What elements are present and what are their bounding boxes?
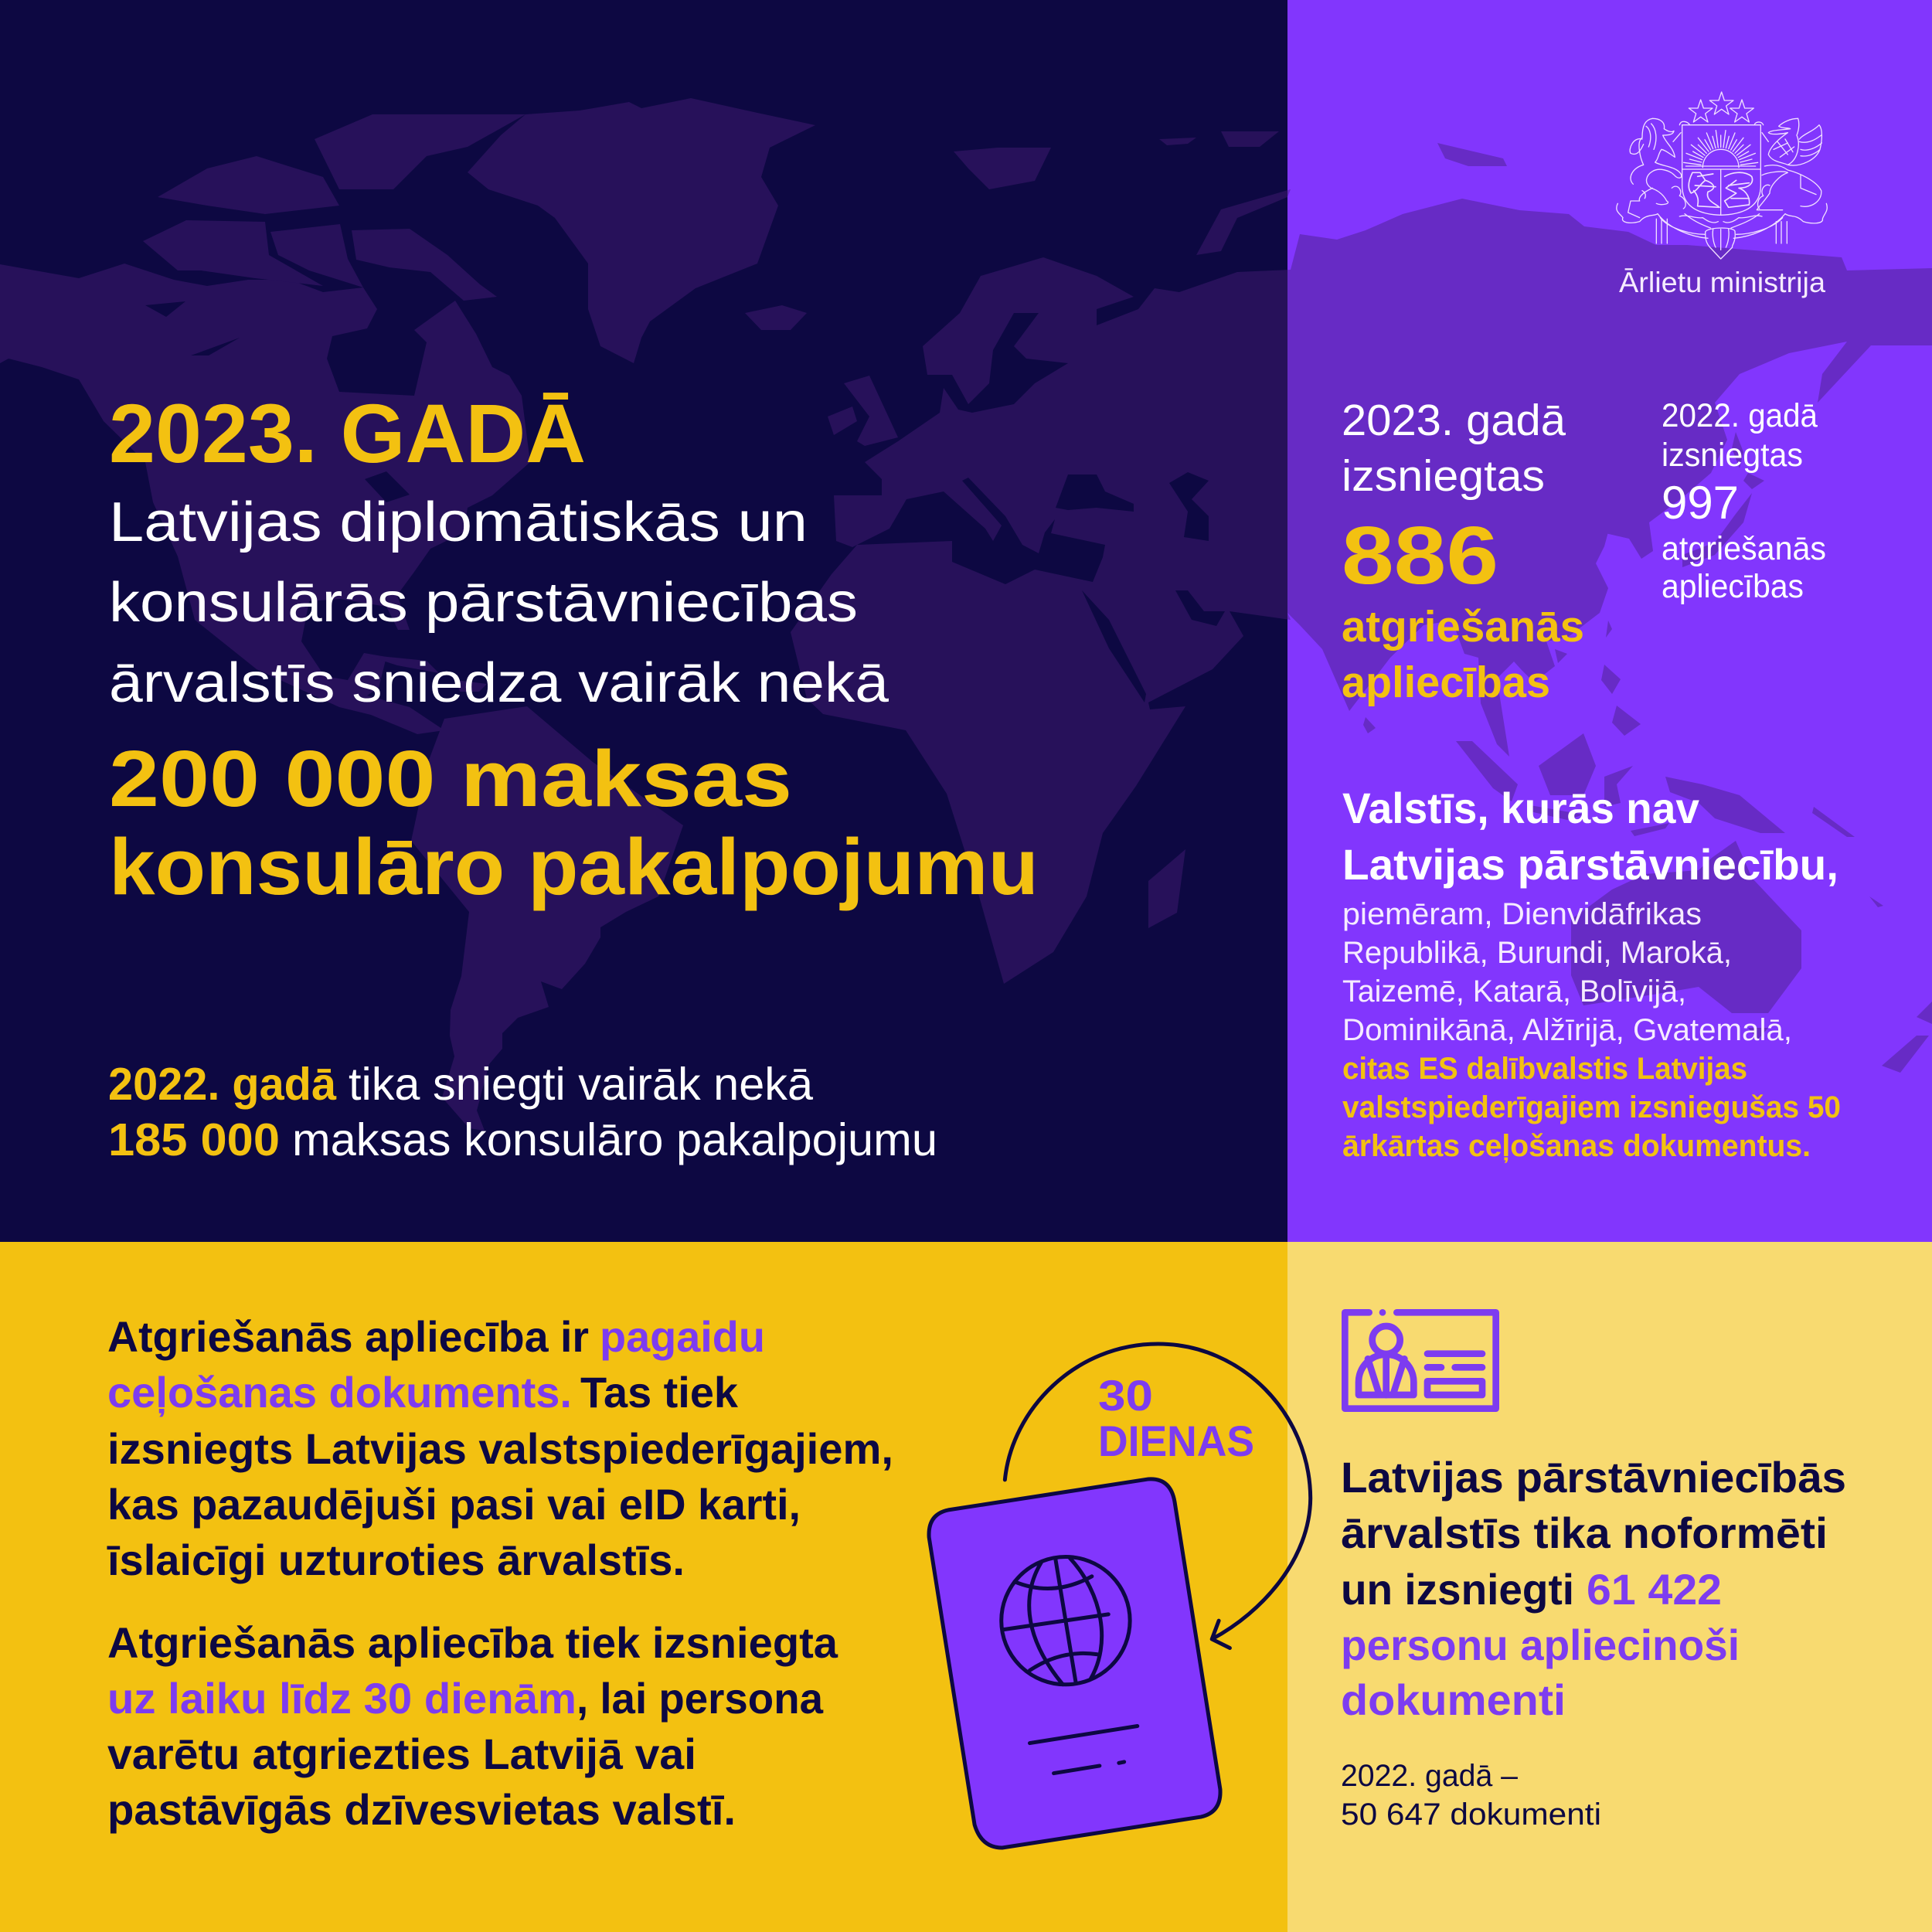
text block: identity documents: dokumenti: [1341, 1675, 1566, 1724]
text block: return certificate explanation: varētu atgriezties Latvijā vai: [107, 1730, 696, 1778]
arrow: [1005, 1344, 1311, 1648]
stat: 2023 certificates: apliecības: [1342, 658, 1550, 707]
text block: return certificate explanation: izsniegts Latvijas valstspiederīgajiem,: [107, 1424, 893, 1473]
text block: return certificate explanation: ceļošanas dokuments.: [107, 1368, 572, 1417]
intro text: konsulārās pārstāvniecības: [109, 572, 858, 634]
text block: countries without representation: Republikā, Burundi, Marokā,: [1342, 936, 1732, 970]
heading: 2023. GADĀ: 2023. GADĀ: [109, 386, 586, 480]
text block: return certificate explanation: pagaidu: [600, 1312, 765, 1361]
text block: return certificate explanation: kas pazaudējuši pasi vai eID karti,: [107, 1480, 801, 1529]
text block: countries without representation: Latvijas pārstāvniecību,: [1342, 840, 1838, 889]
panel: yellow bottom left: [0, 1242, 1287, 1932]
stat: 2022 certificates: 997: [1662, 477, 1739, 529]
panel: dark map background: [0, 98, 1287, 1131]
text block: return certificate explanation: Atgriešanās apliecība tiek izsniegta: [107, 1618, 838, 1667]
2022 comparison text: maksas konsulāro pakalpojumu: [292, 1114, 937, 1165]
label: 30 DIENAS: 30: [1098, 1371, 1153, 1420]
stat: 2023 certificates: 2023. gadā: [1342, 396, 1566, 445]
world map on purple panel: [1287, 143, 1932, 1073]
text: ministry name: Ārlietu ministrija: [1619, 267, 1825, 298]
stat: 2022 certificates: izsniegtas: [1662, 437, 1803, 474]
2022 comparison text: 185 000: [108, 1114, 280, 1165]
label: 30 DIENAS: [1098, 1371, 1254, 1465]
text block: return certificate explanation: , lai persona: [577, 1674, 824, 1723]
text block: return certificate explanation: Atgriešanās apliecība ir: [107, 1312, 589, 1361]
panel: purple map background: [1287, 0, 1932, 1242]
text block: countries without representation: ārkārtas ceļošanas dokumentus.: [1342, 1129, 1811, 1163]
intro text: Latvijas diplomātiskās un: [109, 492, 808, 553]
text block: countries without representation: Dominikānā, Alžīrijā, Gvatemalā,: [1342, 1013, 1792, 1047]
text block: countries without representation: Valstīs, kurās nav: [1342, 784, 1699, 832]
headline block: [109, 386, 1039, 911]
icon: ID card: [1345, 1309, 1496, 1409]
2022 comparison text: 2022. gadā: [108, 1059, 337, 1110]
text block: identity documents: Latvijas pārstāvniecībās: [1341, 1453, 1846, 1502]
passport: [929, 1344, 1311, 1848]
2022 comparison text: tika sniegti vairāk nekā: [349, 1059, 813, 1110]
stat: 2022 certificates: atgriešanās: [1662, 530, 1826, 567]
stat: 2022 certificates: 2022. gadā: [1662, 397, 1818, 434]
text block: return certificate explanation: Tas tiek: [580, 1368, 739, 1417]
intro text: ārvalstīs sniedza vairāk nekā: [109, 652, 889, 714]
text: 2022 documents: [1341, 1759, 1601, 1832]
stat: 2023 certificates: 886: [1342, 510, 1498, 601]
key figure: 200 000 maksas: [109, 734, 792, 823]
stat: 2023 certificates: [1342, 396, 1584, 707]
text block: identity documents: personu apliecinoši: [1341, 1621, 1740, 1669]
world map on dark panel: [0, 98, 1287, 1131]
stat: 2022 certificates: [1662, 397, 1826, 605]
key figure: konsulāro pakalpojumu: [109, 822, 1039, 911]
text block: countries without representation: valstspiederīgajiem izsniegušas 50: [1342, 1090, 1841, 1124]
intro text: [109, 492, 889, 714]
logo: coat of arms and ministry name: [1617, 92, 1827, 298]
text block: countries without representation: citas ES dalībvalstis Latvijas: [1342, 1052, 1747, 1086]
key figure: [109, 734, 1039, 911]
text block: return certificate explanation: uz laiku līdz 30 dienām: [107, 1674, 577, 1723]
text block: return certificate explanation: īslaicīgi uzturoties ārvalstīs.: [107, 1536, 685, 1584]
label: 30 DIENAS: DIENAS: [1098, 1417, 1254, 1465]
text block: identity documents: un izsniegti: [1341, 1565, 1574, 1614]
icon: Latvian coat of arms: [1617, 92, 1827, 259]
text block: countries without representation: piemēram, Dienvidāfrikas: [1342, 897, 1702, 931]
text block: return certificate explanation: [107, 1312, 893, 1834]
stat: 2023 certificates: atgriešanās: [1342, 602, 1584, 651]
stat: 2023 certificates: izsniegtas: [1342, 451, 1545, 501]
panel: light yellow bottom right: [1287, 1242, 1932, 1932]
text block: identity documents: 61 422: [1587, 1565, 1722, 1614]
text block: return certificate explanation: pastāvīgās dzīvesvietas valstī.: [107, 1785, 736, 1834]
text: 2022 documents: 50 647 dokumenti: [1341, 1798, 1601, 1832]
text: 2022 documents: 2022. gadā –: [1341, 1759, 1519, 1793]
text block: countries without representation: [1342, 784, 1841, 1163]
2022 comparison text: [108, 1059, 937, 1165]
text block: identity documents: [1341, 1453, 1846, 1832]
text block: identity documents: ārvalstīs tika noformēti: [1341, 1509, 1828, 1557]
stat: 2022 certificates: apliecības: [1662, 568, 1804, 605]
text block: countries without representation: Taizemē, Katarā, Bolīvijā,: [1342, 975, 1686, 1009]
icon: passport with 30-day arrow: [929, 1344, 1311, 1848]
